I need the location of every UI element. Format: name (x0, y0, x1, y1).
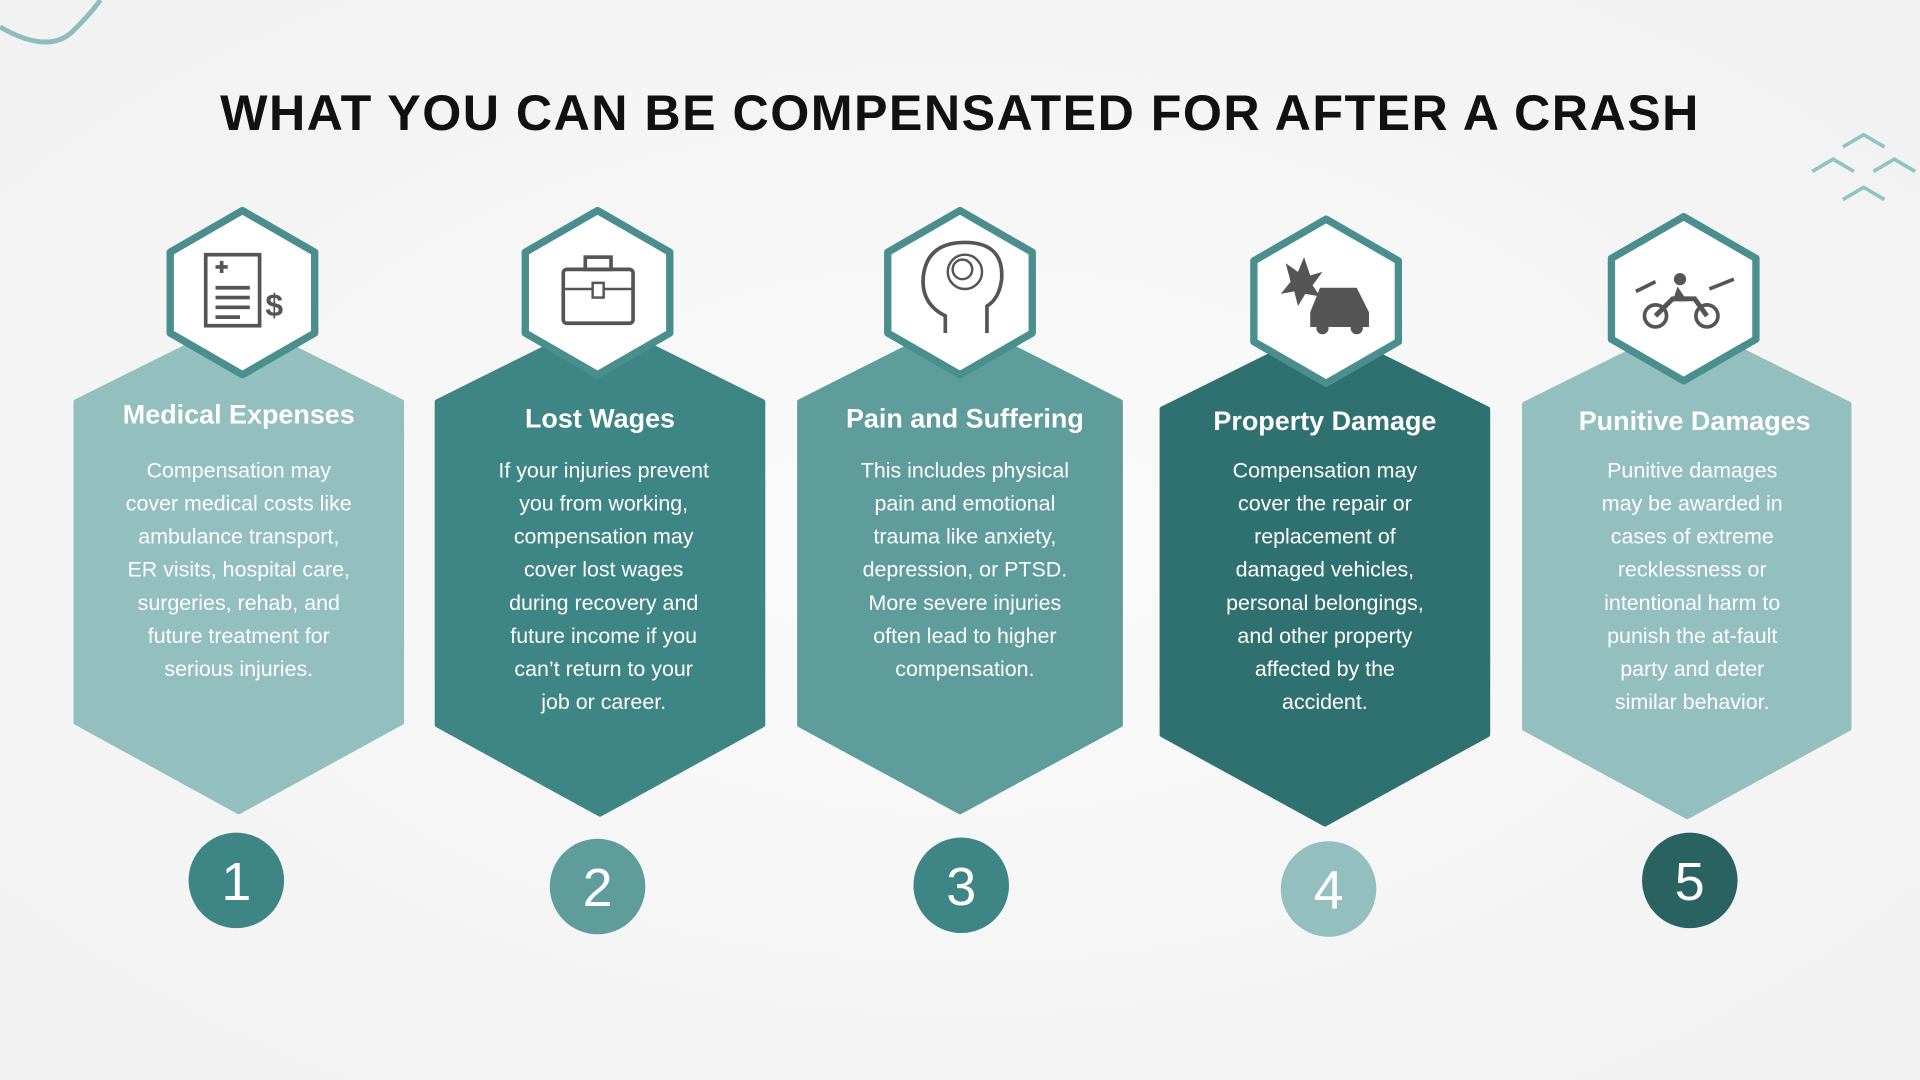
panel: lost wages: during recovery and (509, 591, 698, 615)
number 1 (189, 833, 284, 928)
panel: punitive damages: Punitive damages (1607, 459, 1777, 483)
panel: property damage: cover the repair or (1238, 492, 1412, 516)
panel: lost wages: you from working, (519, 492, 688, 516)
panel: property damage: replacement of (1254, 525, 1396, 549)
panel: property damage: Compensation may (1233, 459, 1417, 483)
icon: briefcase (525, 211, 670, 375)
panel: pain and suffering: often lead to higher (873, 624, 1057, 648)
panel: punitive damages: intentional harm to (1604, 591, 1780, 615)
panel: medical expenses: surgeries, rehab, and (138, 591, 340, 615)
icon: head (888, 211, 1032, 375)
panel: medical expenses (76, 211, 402, 928)
panel: property damage (1162, 219, 1488, 937)
panel: pain and suffering (800, 211, 1120, 933)
panel: property damage: personal belongings, (1226, 591, 1424, 615)
icon: motorcycle (1611, 217, 1756, 381)
panel: property damage: damaged vehicles, (1236, 558, 1414, 582)
number 3: 3 (946, 857, 976, 917)
panel: lost wages: cover lost wages (524, 558, 683, 582)
panel: lost wages: Lost Wages (525, 403, 675, 433)
number 4: 4 (1314, 861, 1344, 921)
panel: pain and suffering: pain and emotional (874, 492, 1055, 516)
icon: medical bill (170, 211, 315, 375)
panel: punitive damages: may be awarded in (1602, 492, 1783, 516)
panel: lost wages: compensation may (514, 525, 694, 549)
panel: property damage: and other property (1237, 624, 1413, 648)
panel: punitive damages: party and deter (1620, 657, 1764, 681)
icon: medical bill: $ (265, 287, 283, 323)
panel: medical expenses: ER visits, hospital care, (128, 558, 350, 582)
number 2: 2 (583, 858, 613, 918)
panel: pain and suffering: More severe injuries (869, 591, 1061, 615)
number 2 (550, 839, 645, 934)
icon: car crash (1254, 219, 1398, 383)
panel: pain and suffering: trauma like anxiety, (873, 525, 1056, 549)
panel: punitive damages: Punitive Damages (1579, 406, 1811, 436)
panel: property damage: accident. (1282, 690, 1368, 714)
panel: pain and suffering: This includes physical (861, 459, 1069, 483)
panel: pain and suffering: Pain and Suffering (846, 403, 1084, 433)
panel: medical expenses: Compensation may (147, 459, 331, 483)
number 5 (1642, 833, 1738, 928)
panel: punitive damages: recklessness or (1618, 558, 1767, 582)
panel: medical expenses: ambulance transport, (138, 525, 339, 549)
panel: lost wages: job or career. (540, 690, 666, 714)
panel: pain and suffering: depression, or PTSD. (863, 558, 1067, 582)
panel: lost wages (437, 211, 763, 934)
panel: punitive damages: cases of extreme (1611, 525, 1774, 549)
panel: medical expenses: cover medical costs like (126, 492, 352, 516)
decoration: corner curve (0, 0, 100, 42)
panel: property damage: affected by the (1255, 657, 1395, 681)
panel: punitive damages: punish the at-fault (1607, 624, 1777, 648)
panel: lost wages: can’t return to your (514, 657, 693, 681)
number 5: 5 (1675, 852, 1705, 912)
panel: medical expenses: Medical Expenses (123, 400, 355, 430)
number 3 (913, 838, 1009, 933)
decoration: chevrons (1812, 135, 1915, 200)
number 4 (1281, 841, 1376, 937)
panel: lost wages: future income if you (510, 624, 697, 648)
panel: punitive damages (1524, 217, 1849, 928)
number 1: 1 (221, 852, 251, 912)
panel: lost wages: If your injuries prevent (498, 459, 709, 483)
title: WHAT YOU CAN BE COMPENSATED FOR AFTER A CRASH (220, 85, 1700, 141)
panel: property damage: Property Damage (1213, 406, 1436, 436)
panel: medical expenses: future treatment for (148, 624, 330, 648)
panel: medical expenses: serious injuries. (164, 657, 313, 681)
panel: punitive damages: similar behavior. (1615, 690, 1770, 714)
panel: pain and suffering: compensation. (895, 657, 1035, 681)
